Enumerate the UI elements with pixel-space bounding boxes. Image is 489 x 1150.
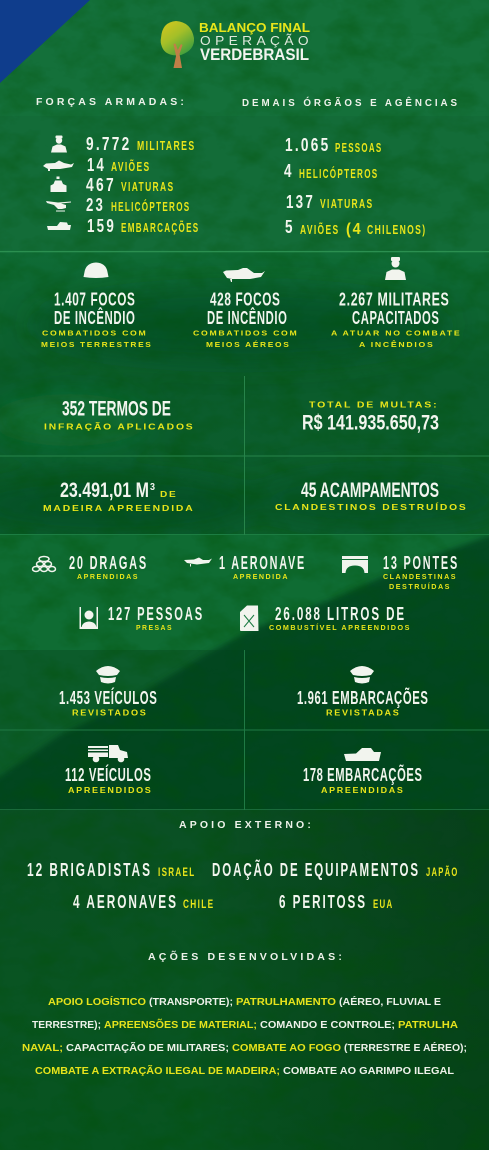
- panel: focos terrestres: DE INCÊNDIO: [54, 307, 136, 328]
- panel: militares capacitados: [331, 257, 462, 349]
- icon: bridge: [342, 556, 368, 573]
- text block: ações desenvolvidas: COMBATE AO FOGO: [232, 1042, 341, 1054]
- panel: demais órgãos list: 5: [285, 217, 292, 237]
- panel: focos aéreos: 428 FOCOS: [210, 288, 280, 310]
- panel: demais órgãos list: 4: [284, 161, 292, 181]
- panel: forças armadas list: 9.772: [86, 134, 132, 154]
- panel: apoio externo list: 6 PERITOSS: [279, 892, 367, 912]
- panel: forças armadas list: EMBARCAÇÕES: [121, 220, 200, 235]
- panel: madeira apreendida: [43, 479, 194, 513]
- icon: plane: [43, 160, 74, 171]
- panel: demais órgãos list: AVIÕES: [300, 222, 340, 237]
- panel: pessoas presas: PRESAS: [136, 625, 173, 632]
- icon: soldier: [385, 257, 406, 280]
- panel: focos terrestres: COMBATIDOS COM: [42, 328, 148, 338]
- panel: focos aéreos: DE INCÊNDIO: [207, 307, 288, 328]
- text block: ações desenvolvidas: PATRULHA: [398, 1019, 458, 1031]
- panel: pontes: CLANDESTINAS: [383, 574, 457, 581]
- panel: embarcações revistadas: REVISTADAS: [326, 708, 400, 718]
- panel: demais órgãos list: (4: [346, 221, 362, 238]
- text block: ações desenvolvidas: COMANDO E CONTROLE;: [260, 1019, 395, 1031]
- icon: plane: [223, 268, 265, 282]
- panel: termos de infração: INFRAÇÃO APLICADOS: [44, 422, 194, 432]
- panel: veículos revistados: 1.453 VEÍCULOS: [59, 687, 158, 708]
- panel: aeronave: 1 AERONAVE: [219, 553, 306, 573]
- panel: demais órgãos list: HELICÓPTEROS: [299, 166, 378, 181]
- panel: acampamentos: [275, 479, 468, 512]
- title: BALANÇO FINAL: [199, 21, 310, 35]
- panel: apoio externo list: CHILE: [183, 897, 214, 911]
- panel: demais órgãos list: 137: [286, 192, 315, 212]
- corner: blue triangle: [0, 0, 90, 83]
- panel: embarcações revistadas: [297, 666, 428, 718]
- title: VERDEBRASIL: [200, 46, 309, 64]
- panel: dragas: 20 DRAGAS: [69, 553, 148, 573]
- panel: termos de infração: 352 TERMOS DE: [62, 398, 171, 420]
- icon: boat: [47, 222, 71, 230]
- panel: demais órgãos list: PESSOAS: [335, 141, 382, 155]
- panel: veículos apreendidos: APREENDIDOS: [68, 786, 152, 795]
- panel: forças armadas list: MILITARES: [137, 139, 196, 153]
- panel: combustível: [240, 604, 411, 632]
- panel: apoio externo list: [27, 859, 458, 912]
- panel: veículos apreendidos: 112 VEÍCULOS: [65, 764, 152, 785]
- panel: apoio externo list: JAPÃO: [426, 864, 458, 879]
- panel: dragas: APRENDIDAS: [77, 574, 139, 581]
- text block: ações desenvolvidas: TERRESTRE);: [32, 1019, 101, 1031]
- panel: focos terrestres: MEIOS TERRESTRES: [41, 340, 152, 349]
- panel: forças armadas list: 159: [87, 216, 116, 236]
- panel: veículos revistados: REVISTADOS: [72, 708, 148, 718]
- panel: total de multas: R$ 141.935.650,73: [302, 412, 439, 434]
- icon: prisoner: [80, 607, 98, 629]
- panel: apoio externo list: EUA: [373, 897, 394, 911]
- text block: ações desenvolvidas: (AÉREO, FLUVIAL E: [339, 995, 441, 1008]
- panel: madeira apreendida: DE: [160, 489, 178, 499]
- panel: combustível: 26.088 LITROS DE: [275, 604, 406, 624]
- title: OPERAÇÃO: [200, 34, 313, 48]
- panel: total de multas: TOTAL DE MULTAS:: [309, 400, 438, 410]
- title: [199, 21, 313, 64]
- panel: apoio externo list: ISRAEL: [158, 865, 196, 879]
- panel: embarcações apreendidas: [303, 748, 422, 795]
- panel: pessoas presas: 127 PESSOAS: [108, 604, 204, 624]
- text block: ações desenvolvidas: NAVAL;: [22, 1042, 63, 1054]
- panel: termos de infração: [44, 398, 194, 432]
- panel: total de multas: [302, 400, 439, 434]
- text block: ações desenvolvidas: COMBATE A EXTRAÇÃO ILEGAL DE MADEIRA;: [35, 1064, 280, 1077]
- panel: madeira apreendida: 23.491,01 M: [60, 479, 149, 502]
- icon: plane: [184, 558, 212, 566]
- panel: focos aéreos: COMBATIDOS COM: [193, 328, 298, 338]
- text block: ações desenvolvidas: (TRANSPORTE);: [149, 996, 233, 1008]
- heading: ações desenvolvidas: AÇÕES DESENVOLVIDAS:: [148, 950, 345, 963]
- text block: ações desenvolvidas: PATRULHAMENTO: [236, 996, 336, 1008]
- panel: focos terrestres: [41, 262, 152, 349]
- panel: forças armadas list: 467: [86, 175, 116, 195]
- panel: veículos revistados: [59, 666, 158, 718]
- panel: militares capacitados: A INCÊNDIOS: [359, 340, 434, 349]
- logo: tree icon: [161, 21, 194, 68]
- panel: forças armadas list: 14: [87, 155, 106, 175]
- icon: hard hat: [84, 262, 108, 278]
- panel: forças armadas list: VIATURAS: [121, 180, 174, 194]
- icon: car: [50, 176, 66, 192]
- text block: ações desenvolvidas: COMBATE AO GARIMPO ILEGAL: [283, 1065, 455, 1077]
- panel: veículos apreendidos: [65, 745, 152, 795]
- heading: apoio externo: APOIO EXTERNO:: [179, 820, 314, 831]
- icon: helicopter: [46, 201, 71, 212]
- text block: ações desenvolvidas: (TERRESTRE E AÉREO);: [344, 1041, 467, 1054]
- panel: madeira apreendida: MADEIRA APREENDIDA: [43, 503, 194, 513]
- panel: forças armadas list: 23: [86, 195, 105, 215]
- panel: focos aéreos: MEIOS AÉREOS: [206, 340, 290, 349]
- panel: militares capacitados: A ATUAR NO COMBATE: [331, 328, 462, 338]
- icon: boat: [344, 748, 381, 761]
- panel: focos terrestres: 1.407 FOCOS: [54, 288, 136, 310]
- panel: demais órgãos list: 1.065: [285, 135, 330, 155]
- panel: combustível: COMBUSTÍVEL APREENDIDOS: [269, 623, 411, 632]
- panel: pessoas presas: [80, 604, 204, 632]
- icon: cap: [350, 666, 374, 684]
- panel: forças armadas list: HELICÓPTEROS: [111, 199, 190, 214]
- panel: forças armadas list: AVIÕES: [111, 159, 150, 174]
- heading: forças armadas: FORÇAS ARMADAS:: [36, 97, 187, 108]
- panel: aeronave: [184, 553, 306, 581]
- panel: demais órgãos list: VIATURAS: [320, 197, 374, 211]
- panel: apoio externo list: 12 BRIGADISTAS: [27, 860, 152, 880]
- icon: soldier: [51, 136, 67, 152]
- icon: truck: [88, 745, 128, 762]
- panel: demais órgãos list: [284, 135, 426, 238]
- panel: aeronave: APRENDIDA: [233, 574, 289, 581]
- panel: focos aéreos: [193, 268, 298, 349]
- text block: ações desenvolvidas: APOIO LOGÍSTICO: [48, 995, 146, 1008]
- text block: ações desenvolvidas: APREENSÕES DE MATERIAL;: [104, 1018, 257, 1031]
- panel: acampamentos: CLANDESTINOS DESTRUÍDOS: [275, 502, 468, 512]
- panel: embarcações apreendidas: APREENDIDAS: [321, 786, 404, 795]
- panel: forças armadas list: [43, 134, 200, 236]
- panel: apoio externo list: 4 AERONAVES: [73, 892, 178, 912]
- panel: madeira apreendida: 3: [150, 482, 155, 493]
- panel: pontes: DESTRUÍDAS: [389, 582, 451, 591]
- panel: dragas: [32, 553, 148, 581]
- icon: logs: [32, 556, 56, 572]
- icon: jerrycan: [240, 606, 258, 631]
- text block: ações desenvolvidas: CAPACITAÇÃO DE MILITARES;: [66, 1041, 229, 1054]
- panel: demais órgãos list: CHILENOS): [367, 223, 426, 237]
- heading: demais órgãos: DEMAIS ÓRGÃOS E AGÊNCIAS: [242, 96, 460, 109]
- panel: pontes: [342, 553, 459, 591]
- text block: ações desenvolvidas: [22, 995, 467, 1077]
- icon: cap: [96, 666, 120, 684]
